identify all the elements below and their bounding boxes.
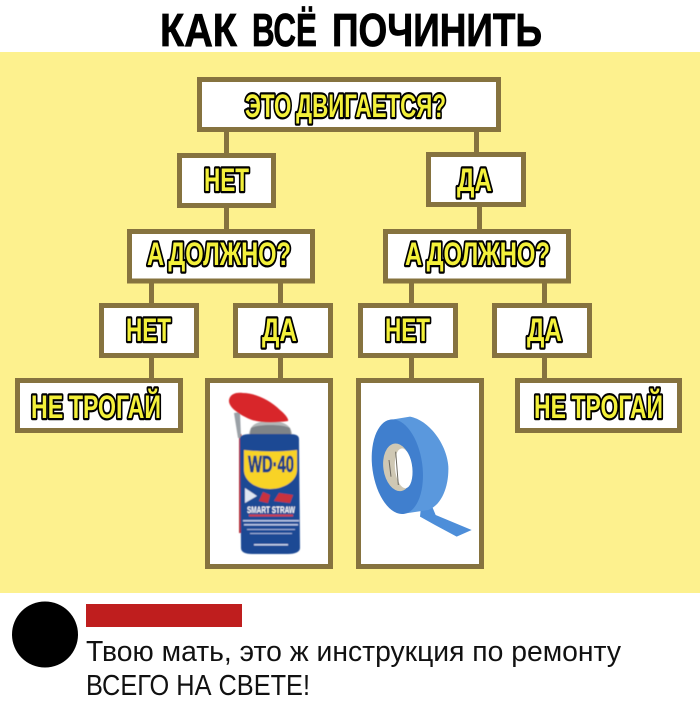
box: left no: НЕТ xyxy=(126,312,171,348)
box: right should it question xyxy=(386,232,568,281)
comment text xyxy=(86,636,622,702)
icon: black avatar circle xyxy=(12,602,78,668)
panel: flowchart background xyxy=(0,52,700,593)
redacted username bar xyxy=(86,604,242,627)
box: left should it question xyxy=(130,232,312,281)
box: first no: НЕТ xyxy=(204,162,249,198)
box: left no xyxy=(102,306,196,356)
icon: blue tape roll xyxy=(366,416,472,537)
box: WD-40 image frame xyxy=(208,380,330,566)
box: left should it question: А ДОЛЖНО? xyxy=(147,236,291,272)
box: right do not touch xyxy=(518,380,680,430)
box: first yes xyxy=(428,154,524,204)
icon: WD-40 spray can: WD·40 xyxy=(248,451,294,477)
comment text: Твою мать, это ж инструкция по ремонту xyxy=(86,636,622,668)
comment text: ВСЕГО НА СВЕТЕ! xyxy=(86,670,310,702)
box: first yes: ДА xyxy=(457,162,492,198)
connector lines xyxy=(149,130,547,380)
title: ПОЧИНИТЬ xyxy=(332,4,542,56)
box: right yes: ДА xyxy=(527,312,562,348)
icon: WD-40 spray can xyxy=(229,393,300,554)
box: right no: НЕТ xyxy=(385,312,430,348)
box: left yes xyxy=(236,306,330,356)
box: first no xyxy=(180,156,274,206)
title: КАК xyxy=(160,4,238,56)
box: left yes: ДА xyxy=(262,312,297,348)
box: right no xyxy=(360,306,456,356)
title: ВСЁ xyxy=(252,4,317,56)
box: это движется question xyxy=(200,80,498,130)
icon: WD-40 spray can: SMART STRAW xyxy=(247,505,295,516)
box: right should it question: А ДОЛЖНО? xyxy=(405,236,550,272)
box: left do not touch: НЕ ТРОГАЙ xyxy=(31,389,161,425)
box: right yes xyxy=(494,306,590,356)
box: tape image frame xyxy=(358,380,482,566)
title xyxy=(160,4,542,56)
box: это движется question: ЭТО ДВИГАЕТСЯ? xyxy=(245,88,446,124)
box: left do not touch xyxy=(18,380,180,430)
